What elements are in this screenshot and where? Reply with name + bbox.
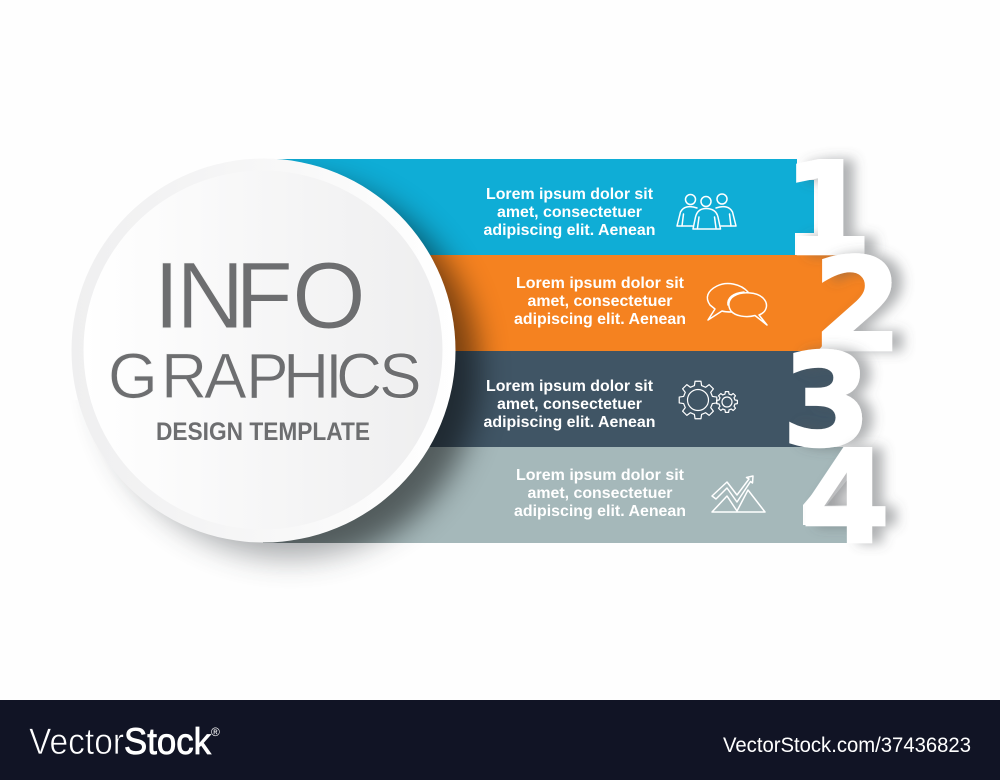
text block: step 2: adipiscing elit. Aenean (514, 311, 686, 328)
footer image id: VectorStock.com/37436823 (723, 734, 971, 757)
circle outer ring (72, 158, 456, 542)
footer registered mark: ® (211, 725, 220, 739)
text block: step 1: Lorem ipsum dolor sit (486, 186, 653, 203)
number 2: 2 (813, 232, 902, 381)
bar 2: orange (263, 255, 872, 351)
text block: step 4 (514, 467, 686, 520)
text block: step 4: adipiscing elit. Aenean (514, 503, 686, 520)
circle inner disc (84, 170, 442, 530)
text block: step 2 (514, 275, 686, 328)
footer logo: VectorStock (29, 721, 211, 762)
text block: step 4: Lorem ipsum dolor sit (516, 467, 684, 484)
icon: gears (679, 381, 737, 419)
number 3: 3 (782, 327, 871, 476)
bar 4: grey-green (263, 447, 852, 543)
icon: growth chart (712, 476, 765, 512)
text block: step 1: adipiscing elit. Aenean (484, 222, 656, 239)
text block: step 3: adipiscing elit. Aenean (484, 414, 656, 431)
text block: step 1 (484, 186, 656, 239)
icon: speech bubbles (707, 284, 767, 325)
icon: people (677, 194, 736, 229)
text block: step 4: amet, consectetuer (528, 485, 673, 502)
text block: step 2: amet, consectetuer (528, 293, 673, 310)
panel: step bars (263, 159, 872, 543)
footer band (0, 700, 1000, 780)
heading: GRAPHICS: GRAPHICS (108, 340, 422, 412)
panel: main circle (72, 158, 456, 542)
number 4 counter shading (827, 474, 852, 505)
number 1: 1 (783, 136, 872, 285)
text block: step 1: amet, consectetuer (497, 204, 642, 221)
number 4: 4 (801, 424, 890, 573)
subheading: design template: DESIGN TEMPLATE (156, 418, 370, 446)
text block: step 3 (484, 378, 656, 431)
circle shadow on bars (263, 159, 498, 543)
bar 3: slate (263, 351, 838, 447)
circle ground shadow (96, 445, 402, 576)
text block: step 2: Lorem ipsum dolor sit (516, 275, 684, 292)
bar 1: blue (263, 159, 814, 255)
text block: step 3: amet, consectetuer (497, 396, 642, 413)
heading: INFO: INFO (154, 243, 366, 349)
text block: step 3: Lorem ipsum dolor sit (486, 378, 653, 395)
